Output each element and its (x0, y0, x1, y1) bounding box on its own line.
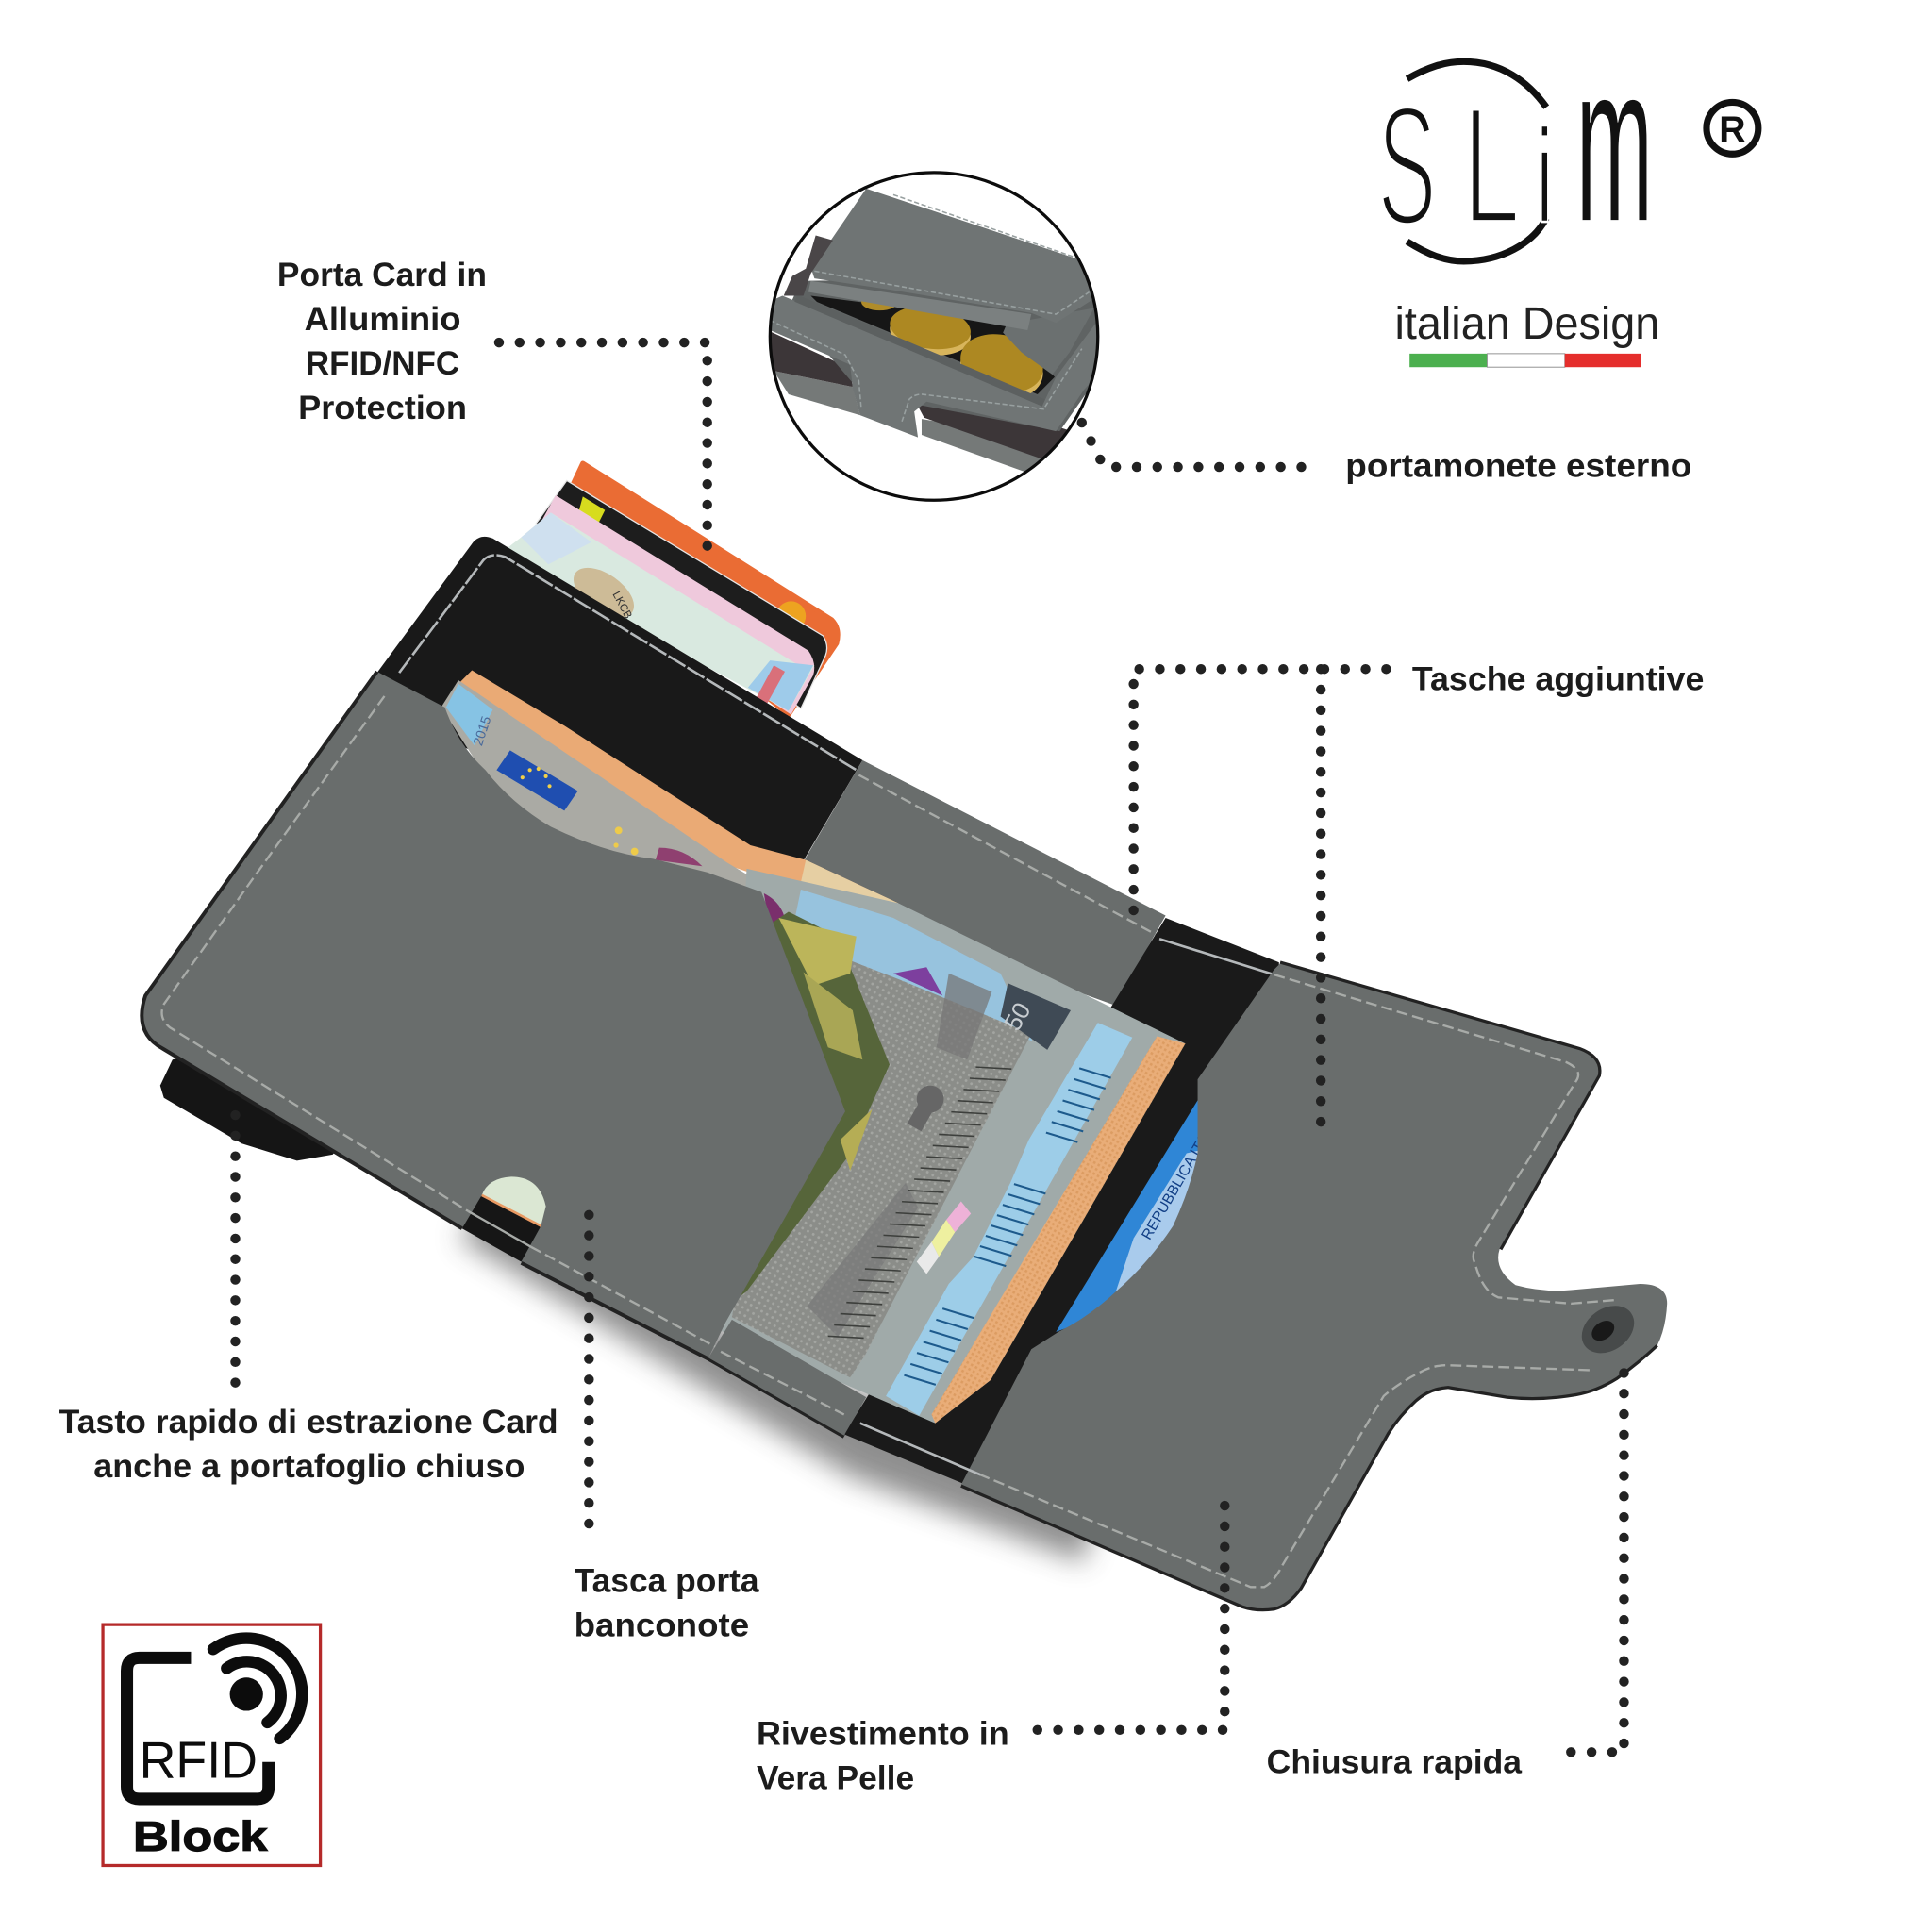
label: banknote pocket (575, 1563, 759, 1644)
flag red (1565, 354, 1641, 367)
lower zipper (796, 298, 1043, 403)
light blue note corner (446, 684, 492, 745)
dotted leader: card holder (499, 342, 708, 555)
label: leather (757, 1715, 1009, 1796)
letter m: m (1576, 17, 1653, 269)
wallet photo (142, 463, 1667, 1610)
hologram yellow (931, 1220, 955, 1257)
purple note detail 2 (764, 893, 787, 937)
faded note edge (801, 860, 898, 919)
zip tape (808, 281, 1031, 330)
snap inner (1588, 1317, 1618, 1345)
hologram (917, 1201, 971, 1274)
left panel stitching (162, 696, 844, 1414)
line 1: Tasca porta (575, 1563, 759, 1600)
pale blue top of note (789, 890, 1033, 1041)
dotted leader: extra pockets (1134, 669, 1386, 1134)
dotted leader: quick closure (1571, 1353, 1624, 1752)
cards sticking out of the aluminium holder (499, 463, 838, 715)
denomination: 50 (998, 997, 1037, 1036)
line 1: Rivestimento in (757, 1715, 1009, 1752)
right panel dark edge (961, 962, 1657, 1610)
blue side band (886, 1023, 1132, 1416)
top flap (810, 189, 1103, 323)
orange note stack (931, 1036, 1185, 1424)
logo ring top (1407, 61, 1546, 108)
ID card photo tone (565, 558, 642, 627)
ID card blue corner (521, 512, 591, 564)
euro banknotes (441, 671, 1185, 1424)
blue document window (1056, 1094, 1234, 1332)
pull tab (160, 1047, 370, 1160)
open pocket interior (810, 295, 1055, 394)
flag green (1409, 354, 1487, 367)
strip stitching (1159, 939, 1274, 974)
purple note detail (656, 848, 702, 866)
line 2: Vera Pelle (757, 1759, 914, 1796)
coin 1 (890, 308, 971, 349)
dark frame left (770, 331, 853, 387)
lower strip stitching (721, 1352, 844, 1414)
dark frame right (919, 406, 1067, 458)
upper pocket stitching (858, 775, 1159, 937)
line 2: anche a portafoglio chiuso (93, 1448, 525, 1485)
body of the coin pocket (769, 295, 1103, 438)
lower grey strip (708, 1320, 866, 1436)
letter i: i (1537, 103, 1553, 251)
purple mark (893, 967, 942, 995)
signal waves (213, 1639, 302, 1739)
card outline icon (127, 1657, 269, 1799)
letter S: S (1377, 72, 1437, 261)
registered R: R (1719, 109, 1746, 150)
yellow card mark (579, 496, 605, 523)
EU flag (496, 750, 578, 810)
black card (536, 480, 827, 708)
pocket backing (789, 277, 1103, 431)
left panel outer dark edge (142, 672, 844, 1437)
line 3: RFID/NFC (306, 345, 459, 382)
snap button (1573, 1296, 1643, 1363)
note dots (613, 826, 639, 855)
right panel stitching (981, 974, 1617, 1587)
zipper pull (784, 235, 833, 295)
flap stitching (814, 194, 1090, 314)
magnifier ring (770, 173, 1098, 500)
RFID text: RFID (140, 1731, 258, 1790)
black under notch (462, 1195, 541, 1261)
dotted leader: coin pocket (1082, 423, 1319, 467)
ID card (499, 512, 814, 711)
coin 1 rim (890, 326, 971, 356)
magnifier contents (772, 189, 1096, 472)
signal dot (230, 1677, 263, 1711)
label: quick closure: Chiusura rapida (1267, 1744, 1522, 1781)
line 4: Protection (298, 390, 467, 426)
strip lower stitching (860, 1424, 981, 1474)
ID card stripes (748, 660, 813, 711)
tagline: italian Design (1395, 298, 1659, 349)
banknote in notch (482, 1176, 546, 1226)
orange card (555, 463, 838, 715)
letter L: L (1462, 73, 1521, 259)
lower grey slab (921, 419, 1041, 472)
flag stars (521, 767, 552, 788)
orange line in notch (482, 1195, 541, 1226)
flag white (1487, 354, 1565, 367)
logo ring bottom (1407, 218, 1546, 261)
upper grey pocket (789, 760, 1166, 1006)
thumb notch (462, 1176, 546, 1261)
document pale band (1115, 1151, 1232, 1293)
magnifier background (764, 166, 1109, 511)
black fabric back (370, 537, 862, 865)
Italian flag bar (1409, 354, 1641, 367)
coin pocket magnifier (764, 166, 1109, 511)
dotted leader: leather (1038, 1493, 1224, 1730)
coin 2 (960, 334, 1043, 391)
small coin behind (861, 301, 894, 311)
left lower grey strip (774, 371, 860, 415)
second black strip (844, 918, 1281, 1491)
label: extra pockets: Tasche aggiuntive (1412, 660, 1704, 697)
blue ticks on band (904, 1068, 1111, 1385)
yellow note highlight 2 (841, 1109, 873, 1171)
stitching in notch (468, 1211, 531, 1247)
blue document (1056, 1100, 1232, 1332)
hologram pink (946, 1201, 971, 1232)
keyhole mark (917, 1086, 943, 1112)
keyhole stem (914, 1099, 930, 1127)
fabric stitching (399, 555, 857, 770)
top orange edge of the note (458, 671, 898, 919)
brand logo (1377, 17, 1758, 367)
dark number patch (1001, 983, 1071, 1050)
logo wordmark (1377, 17, 1653, 269)
ID card code: LKCB (609, 590, 634, 621)
note body (721, 869, 1185, 1424)
ID card red stripe (757, 665, 785, 705)
snap outer (1573, 1296, 1643, 1363)
label: card holder (277, 257, 487, 426)
grey face of the upper note (441, 680, 789, 899)
dark serial ticks on note (828, 1067, 1011, 1338)
line 1: Porta Card in (277, 257, 487, 293)
document text: REPUBBLICA ITALIANA (1139, 1094, 1234, 1242)
label: coin pocket: portamonete esterno (1345, 447, 1691, 484)
hologram silver (917, 1242, 939, 1274)
coin 2 rim (960, 360, 1043, 393)
registered ring (1707, 102, 1758, 154)
note year: 2015 (471, 714, 494, 748)
hatched note face (732, 941, 1031, 1377)
dotted leader: banknote pocket (585, 1215, 592, 1528)
card chip logo (776, 601, 806, 631)
green note architecture (727, 912, 890, 1306)
label: quick release button (59, 1404, 558, 1485)
dark windows on note (937, 974, 991, 1059)
Block text: Block (133, 1814, 268, 1860)
badge frame (103, 1624, 321, 1865)
yellow note highlight (804, 973, 862, 1059)
line 2: banconote (575, 1607, 749, 1644)
inner flap (1003, 308, 1094, 375)
left leather panel (142, 672, 845, 1357)
body stitching (770, 321, 1082, 422)
wallet shadow (458, 1201, 1096, 1562)
RFID block badge (103, 1624, 321, 1865)
registered mark (1707, 102, 1758, 154)
yellow note architecture (778, 918, 857, 986)
right leather panel (961, 963, 1667, 1608)
darker note shading (808, 1183, 918, 1337)
pink card (530, 495, 814, 715)
line 2: Alluminio (305, 301, 460, 338)
dotted leader: quick release button (231, 1115, 239, 1386)
line 1: Tasto rapido di estrazione Card (59, 1404, 558, 1441)
